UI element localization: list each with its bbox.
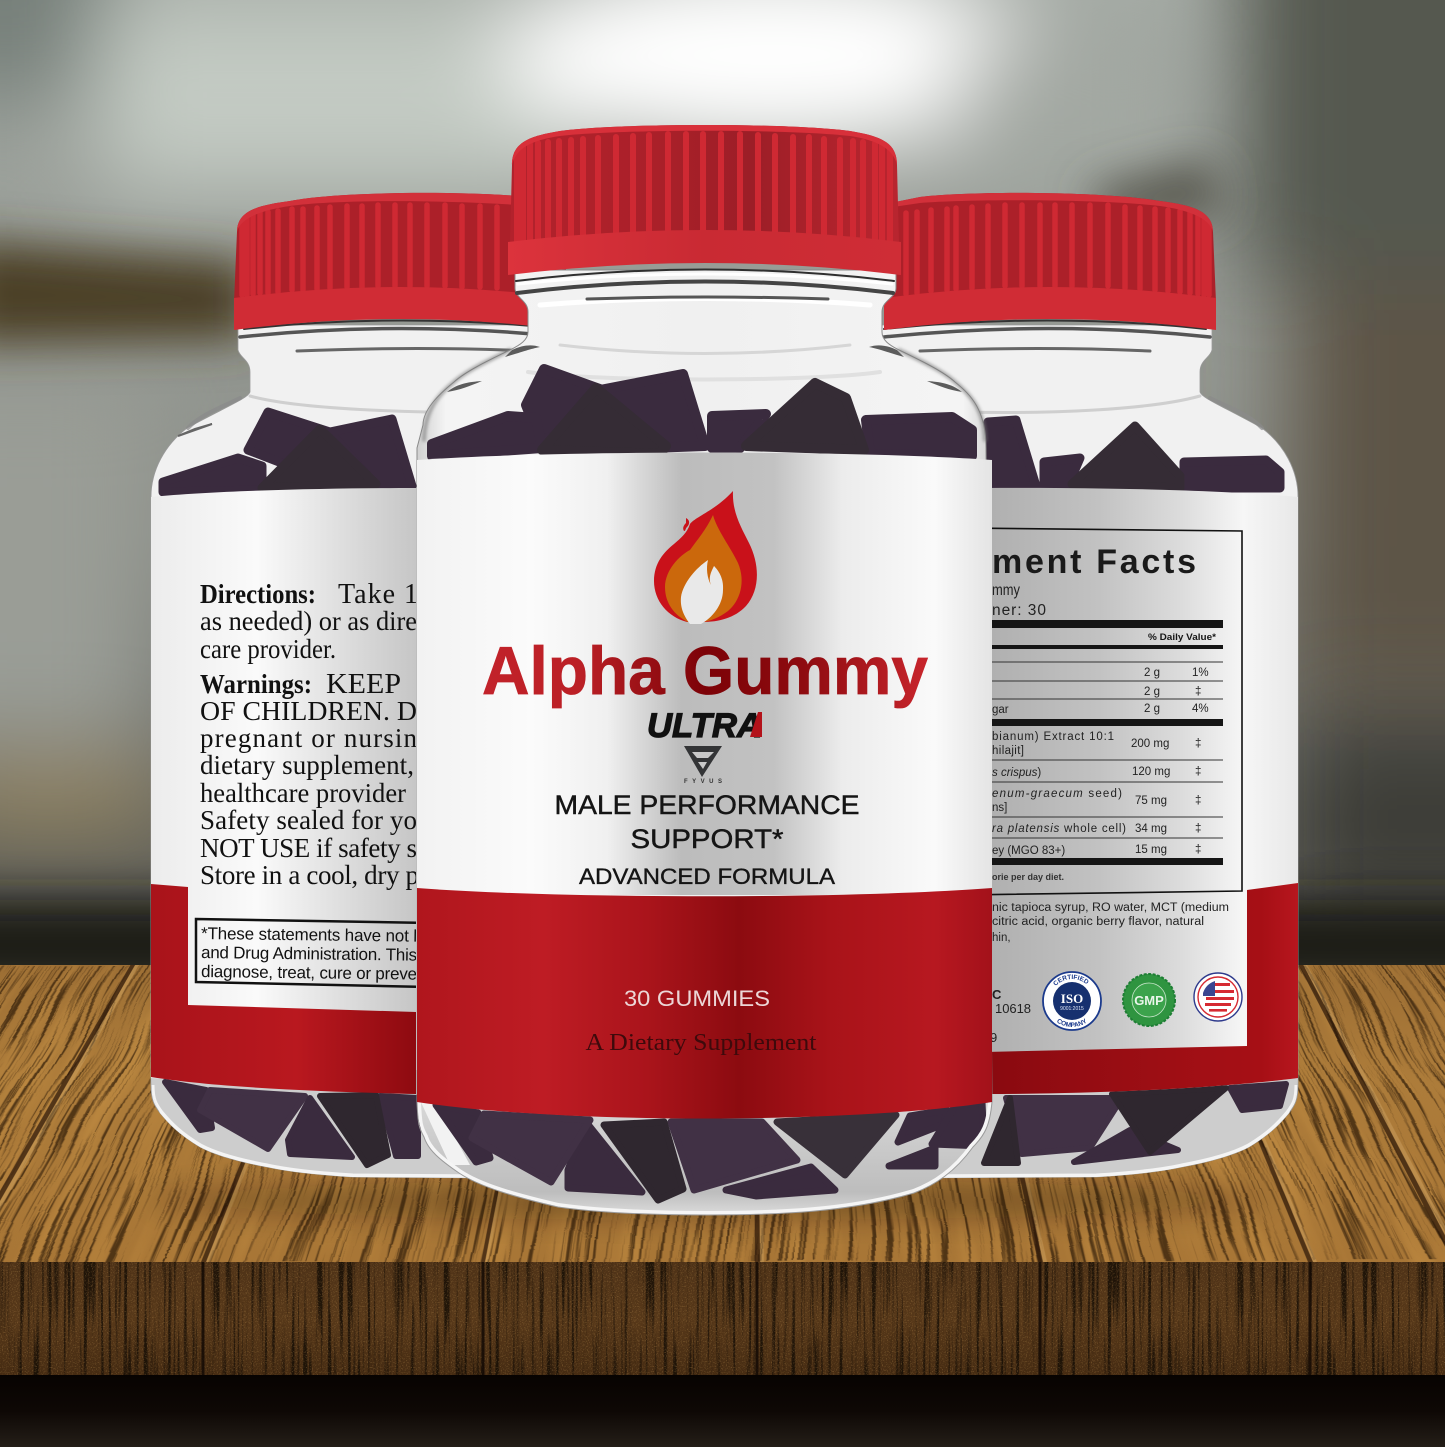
left bottle neck reflections [178, 320, 566, 436]
directions text: Directions: [200, 579, 316, 609]
left bottle top gummies [163, 412, 412, 492]
nutrient rows: 75 mg [1135, 795, 1167, 807]
directions text: Safety sealed for yo [200, 805, 417, 835]
center bottle shoulder reflections [447, 345, 962, 392]
left bottle cap [234, 193, 566, 330]
nutrient rows: s crispus) [992, 767, 1041, 779]
center bottle glass body [417, 270, 992, 1102]
nutrient rows: 200 mg [1131, 738, 1169, 750]
title: Alpha Gummy [482, 633, 928, 709]
wooden table top [0, 965, 1445, 1262]
nutrient rows: ‡ [1195, 844, 1201, 856]
left bottle: back label with directions [151, 193, 570, 1180]
other ingredients [992, 902, 1229, 944]
directions text: Take 1 [338, 579, 418, 610]
facts heading: ment Facts [992, 543, 1196, 581]
left bottle glass body [151, 325, 570, 1178]
other ingredients: nic tapioca syrup, RO water, MCT (medium [992, 902, 1229, 914]
GMP badge [1123, 974, 1175, 1026]
directions text: healthcare provider [200, 778, 406, 808]
FDA disclaimer box: and Drug Administration. This [201, 943, 417, 965]
supplement facts panel [992, 528, 1243, 1042]
right bottle neck reflections [884, 320, 1262, 428]
ISO badge: 9001:2015 [1060, 1006, 1084, 1012]
underside shadow band [0, 1375, 1445, 1447]
FDA disclaimer box: *These statements have not l [201, 924, 417, 946]
left bottle base and bottom gummies [151, 1070, 466, 1178]
directions text: NOT USE if safety s [200, 833, 417, 863]
FDA disclaimer box [196, 919, 430, 987]
nutrient rows: enum-graecum seed) [992, 788, 1122, 800]
nutrient rows: 1% [1192, 667, 1209, 679]
serving lines: mmy [992, 582, 1020, 599]
ISO badge: CERTIFIED [1054, 974, 1088, 986]
right bottle cap [880, 193, 1216, 330]
nutrient rows [992, 667, 1209, 857]
serving lines [992, 586, 1046, 615]
directions text: care provider. [200, 634, 336, 664]
other ingredients: hin, [992, 932, 1011, 944]
company address: C [992, 987, 1002, 1002]
directions text: as needed) or as dire [200, 606, 417, 636]
USA flag badge [1194, 973, 1242, 1021]
subtitle: male performance support: SUPPORT* [630, 824, 784, 854]
nutrient rows: 2 g [1144, 686, 1160, 698]
company address: 10618 [995, 1001, 1031, 1016]
right bottle: supplement facts label [882, 192, 1298, 1178]
nutrient rows: 120 mg [1132, 766, 1170, 778]
nutrient rows: ‡ [1195, 686, 1201, 698]
directions text: Store in a cool, dry p [200, 860, 419, 890]
table rules [985, 620, 1223, 865]
center bottle top gummies [432, 369, 972, 456]
nutrient rows: 15 mg [1135, 844, 1167, 856]
center bottle: front label [417, 125, 992, 1217]
nutrient rows: bianum) Extract 10:1 [992, 731, 1114, 743]
nutrient rows: gar [992, 704, 1009, 716]
table plank surface [0, 965, 1445, 1262]
nutrient rows: ey (MGO 83+) [992, 845, 1065, 857]
center label white area [417, 452, 992, 895]
ULTRA wordmark: ULTRA [647, 707, 762, 745]
table front edge [0, 1262, 1445, 1376]
directions text [196, 579, 430, 987]
nutrient rows: 2 g [1144, 667, 1160, 679]
advanced formula: ADVANCED FORMULA [579, 864, 835, 889]
nutrient rows: 4% [1192, 703, 1209, 715]
subtitle: male performance support [554, 790, 860, 854]
nutrient rows: hilajit] [992, 745, 1024, 757]
FDA disclaimer box: diagnose, treat, cure or preve [201, 962, 417, 984]
blurred room background [0, 0, 1445, 965]
nutrient rows: 2 g [1144, 703, 1160, 715]
ISO badge: COMPANY [1057, 1018, 1086, 1027]
FYVUS logo: FYVUS [684, 779, 722, 785]
icon: flame logo [654, 491, 757, 624]
nutrient rows: ‡ [1195, 823, 1201, 835]
center bottle base and bottom gummies [417, 1095, 992, 1217]
other ingredients: citric acid, organic berry flavor, natural [992, 916, 1204, 928]
footnote: orie per day diet. [992, 872, 1064, 882]
nutrient rows: ‡ [1195, 738, 1201, 750]
center label red band [417, 888, 992, 1118]
nutrient rows: ns] [992, 802, 1007, 814]
directions text: dietary supplement, [200, 750, 414, 780]
right bottle label [985, 488, 1298, 1094]
center bottle base outline [417, 1102, 992, 1215]
left bottle label [151, 488, 416, 1094]
nutrient rows: ‡ [1195, 795, 1201, 807]
nutrient rows: ‡ [1195, 766, 1201, 778]
center bottle cap [508, 125, 901, 275]
right bottle base and bottom gummies [943, 1078, 1298, 1178]
company address: 9 [990, 1030, 997, 1045]
ISO badge [1042, 971, 1102, 1031]
right bottle glass body [880, 325, 1298, 1178]
nutrient rows: 34 mg [1135, 823, 1167, 835]
ISO badge: ISO [1061, 991, 1083, 1006]
center bottle neck reflections [424, 270, 985, 440]
directions text: Warnings: [200, 669, 312, 699]
company address [992, 990, 1030, 1042]
directions text: OF CHILDREN. D [200, 696, 417, 726]
serving lines: ner: 30 [992, 602, 1046, 619]
directions text: KEEP [326, 669, 401, 700]
bottle shadow on table [150, 1180, 1270, 1220]
nutrient rows: ra platensis whole cell) [992, 823, 1126, 835]
dietary supplement line: A Dietary Supplement [586, 1030, 817, 1056]
subtitle: male performance support: MALE PERFORMANCE [554, 790, 860, 820]
right bottle top gummies [988, 420, 1280, 488]
count: 30 GUMMIES [624, 986, 770, 1011]
daily value header: % Daily Value* [1148, 632, 1216, 643]
FYVUS logo [684, 746, 722, 785]
directions text: pregnant or nursin [200, 723, 418, 753]
GMP badge: GMP [1134, 993, 1164, 1008]
